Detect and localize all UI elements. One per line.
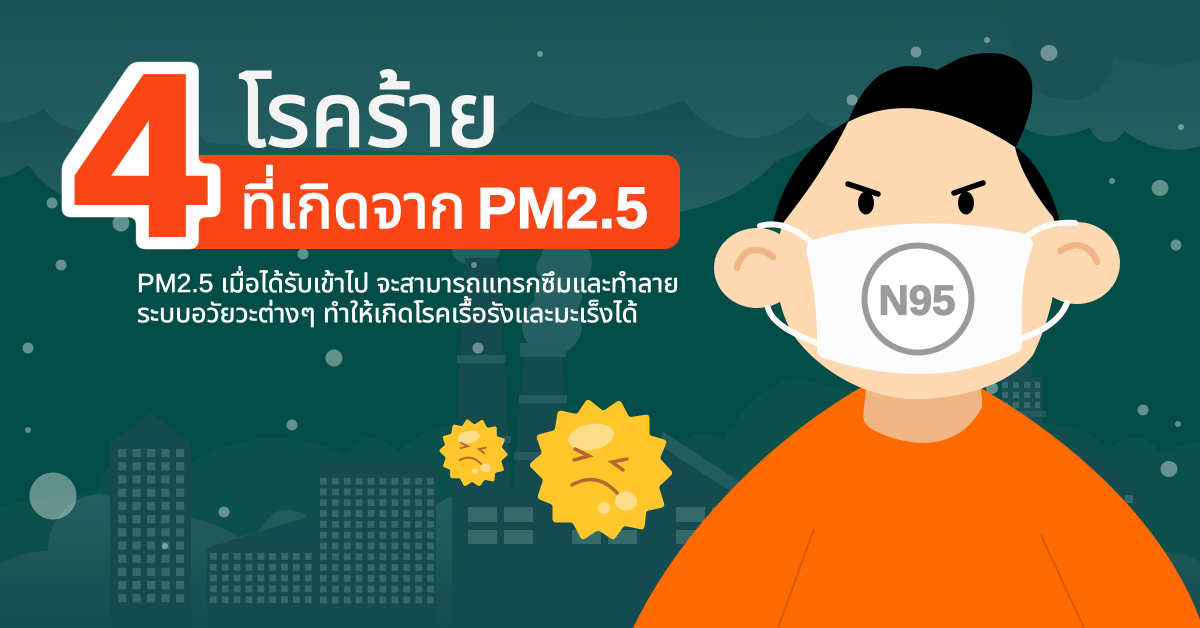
title line 2: PM2.5: [477, 176, 648, 241]
chimney left: [452, 258, 512, 500]
hair top: [848, 53, 1032, 148]
dust particles: [22, 37, 1184, 549]
chimney right bands: [514, 343, 567, 460]
character wearing N95 mask: [633, 53, 1200, 628]
factory roof stripe: [662, 431, 745, 496]
shirt: [633, 388, 1200, 628]
front cloud layer, top: [0, 0, 1200, 155]
brow right: [954, 183, 983, 193]
title line 2: ที่เกิดจาก: [240, 165, 466, 242]
ear left: [714, 228, 800, 308]
back clouds, left: [0, 424, 500, 628]
factory: [452, 258, 760, 628]
top right darker cloud puff: [1000, 0, 1200, 100]
big number 4: 4: [74, 28, 206, 283]
smoke from chimneys: [452, 234, 592, 355]
title line 1: โรคร้าย: [239, 66, 500, 166]
big virus: [532, 402, 670, 537]
ear right: [1034, 222, 1120, 304]
front cloud, bottom right: [1120, 552, 1200, 628]
hair back: [773, 120, 1060, 222]
tall building: [110, 413, 191, 628]
slant roof building: [207, 514, 317, 628]
lower right building: [1060, 432, 1140, 628]
front cloud, bottom left: [0, 494, 452, 628]
back clouds, right: [662, 378, 1200, 628]
neck: [863, 380, 982, 443]
description line 1: PM2.5 เมื่อได้รับเข้าไป จะสามารถแทรกซึมและทำลาย: [137, 266, 679, 298]
chimney left band: [457, 355, 506, 363]
description line 2: ระบบอวัยวะต่างๆ ทำให้เกิดโรคเรื้อรังและมะเร็งได้: [137, 296, 638, 328]
brow left: [848, 184, 878, 194]
face: [776, 108, 1058, 399]
ear inner left: [737, 250, 773, 268]
chimney right: [512, 355, 572, 500]
N95 badge: [864, 246, 972, 352]
factory windows: [468, 507, 741, 544]
description: [137, 266, 679, 328]
orange banner: [170, 155, 680, 249]
mask straps: [760, 223, 1075, 343]
back cloud layer, top: [0, 0, 1020, 212]
small virus: [440, 420, 507, 485]
wide building: [317, 464, 439, 628]
N95 badge: N95: [878, 276, 956, 324]
mask: [806, 223, 1033, 374]
building behind shoulder: [1000, 363, 1046, 425]
eye right: [958, 192, 974, 214]
factory body: [452, 447, 760, 628]
ear inner right: [1060, 245, 1097, 262]
shirt creases: [778, 529, 1084, 628]
eye left: [858, 192, 874, 214]
